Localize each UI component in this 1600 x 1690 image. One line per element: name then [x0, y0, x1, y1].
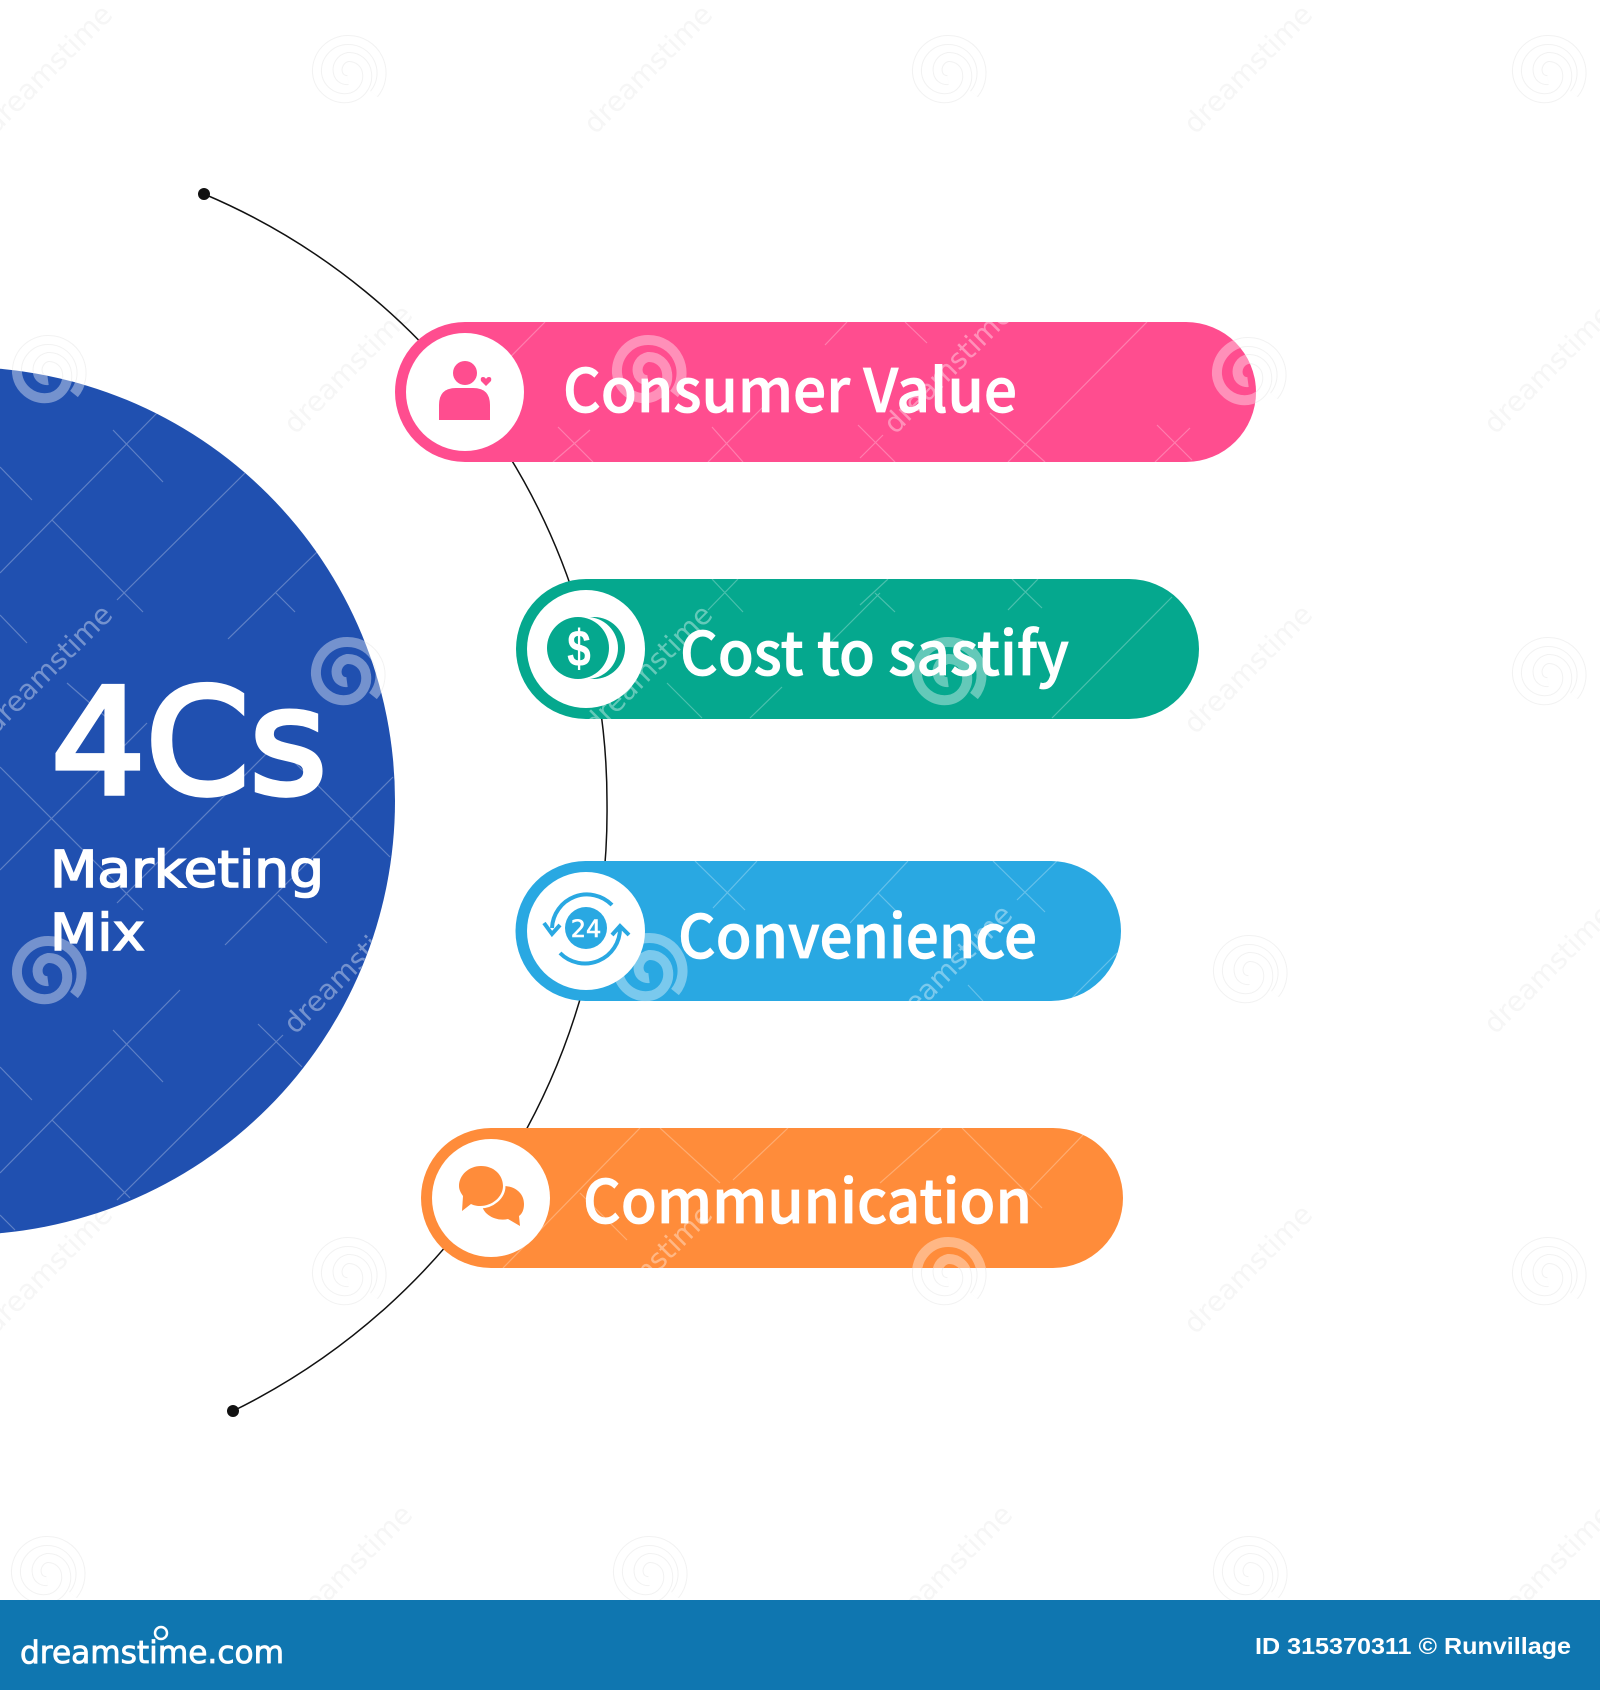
heading: Marketing Mix: Marketing: [50, 841, 324, 900]
footer band: [0, 1600, 1600, 1690]
watermark on white background: dreamstime: [577, 0, 719, 140]
watermark on white background: dreamstime: [277, 1498, 419, 1640]
label: Convenience: Convenience: [678, 889, 1037, 976]
watermark on white background: dreamstime: [277, 298, 419, 440]
watermark overlay on coloured shapes: dreamstime: [277, 298, 419, 440]
panel: cost to satisfy pill: [516, 579, 1199, 719]
watermark overlay on coloured shapes: [0, 322, 1256, 1268]
watermark overlay on coloured shapes: dreamstime: [577, 598, 719, 740]
heading: Marketing Mix: [50, 841, 324, 963]
icon: consumer with heart: [406, 333, 524, 451]
panel: consumer value pill: [395, 322, 1256, 462]
watermark overlay on coloured shapes: dreamstime: [577, 1198, 719, 1340]
icon: 24 hour cycle: 24: [571, 915, 601, 943]
panel: convenience pill: [516, 861, 1121, 1001]
watermark overlay on coloured shapes: dreamstime: [277, 898, 419, 1040]
label: Consumer Value: Consumer Value: [563, 343, 1017, 430]
label: Communication: Communication: [583, 1154, 1032, 1241]
watermark on white background: dreamstime: [1177, 0, 1319, 140]
footer credit: ID 315370311 © Runvillage: [1255, 1633, 1571, 1659]
icon: chat bubbles: [432, 1139, 550, 1257]
heading: Marketing Mix: Mix: [50, 904, 145, 963]
watermark on white background: dreamstime: [1177, 598, 1319, 740]
icon: dollar coins: $: [567, 620, 591, 678]
panel: central blue circle: [0, 367, 395, 1235]
heading: 4Cs: 4Cs: [51, 658, 327, 828]
label: Cost to sastify: Cost to sastify: [680, 606, 1069, 693]
footer logo: dreamstime.com: [20, 1635, 284, 1671]
watermark overlay on coloured shapes: dreamstime: [877, 298, 1019, 440]
panel: communication pill: [421, 1128, 1123, 1268]
watermark on white background: dreamstime: [1177, 1198, 1319, 1340]
watermark overlay on coloured shapes: dreamstime: [877, 898, 1019, 1040]
icon: 24 hour cycle: [527, 872, 645, 990]
connector arc with end dots: [198, 188, 607, 1417]
icon: dollar coins: [527, 590, 645, 708]
watermark on white background: dreamstime: [877, 1498, 1019, 1640]
